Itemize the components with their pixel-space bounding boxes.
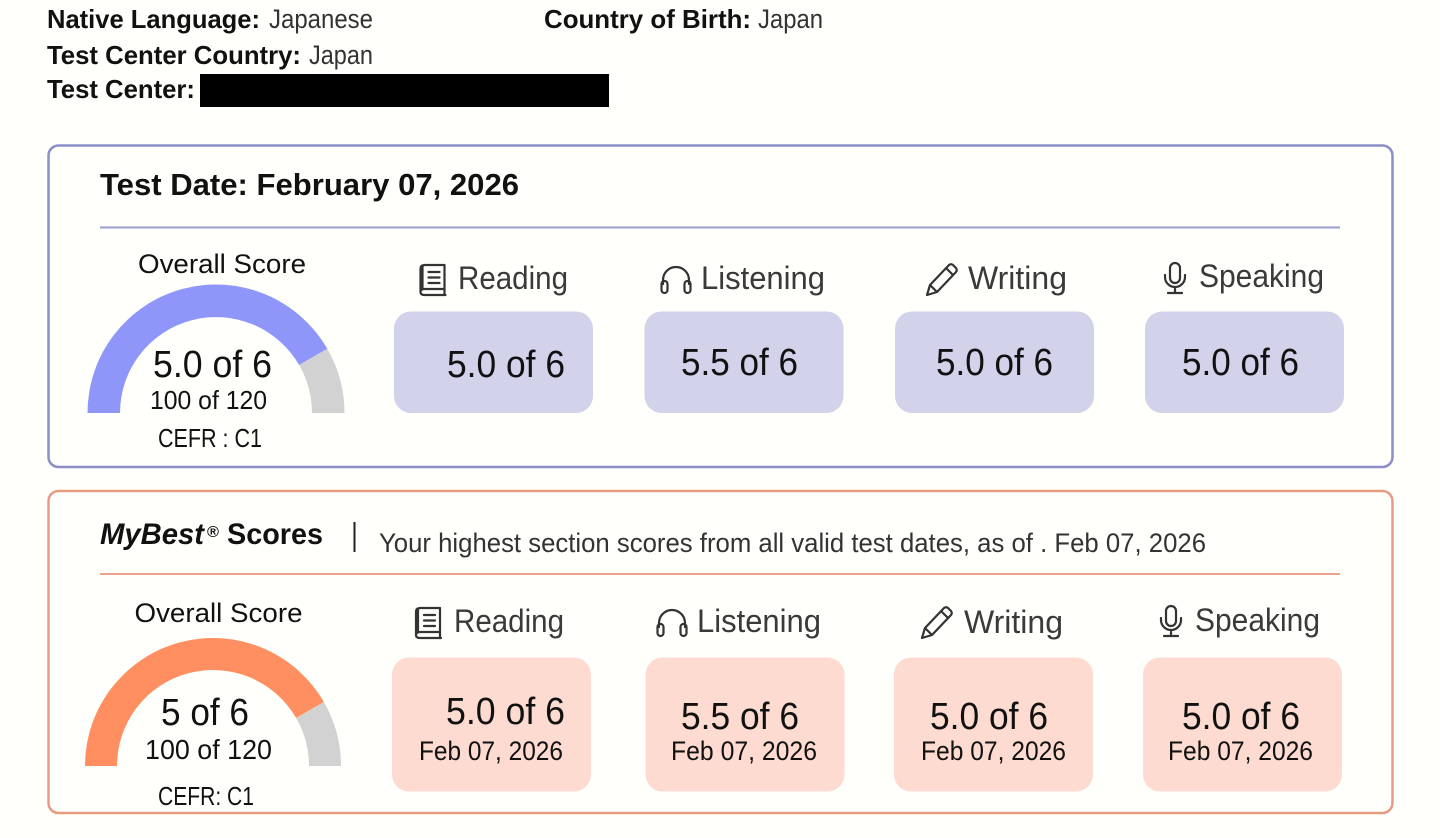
icon: microphone: [1165, 263, 1185, 293]
section: writing: 5.0 of 6: [930, 696, 1048, 738]
candidate details: Japan: [758, 4, 823, 34]
panel: mybest scores: [48, 491, 1392, 813]
section: writing: Feb 07, 2026: [921, 736, 1066, 766]
icon: microphone: [1161, 606, 1181, 636]
section: listening: Listening: [701, 260, 825, 296]
icon: headphones: [662, 267, 690, 293]
heading: mybest scores: MyBest: [100, 518, 206, 551]
icon: book: [420, 265, 446, 295]
section: speaking: 5.0 of 6: [1182, 696, 1300, 738]
section: listening: [646, 603, 844, 792]
overall score gauge: 100 of 120: [150, 385, 267, 415]
section: speaking: Speaking: [1195, 602, 1320, 638]
candidate details: Country of Birth:: [544, 4, 751, 34]
section: listening: Feb 07, 2026: [671, 736, 817, 766]
overall score gauge: CEFR : C1: [158, 423, 262, 453]
overall score gauge: 5 of 6: [161, 692, 249, 734]
overall score gauge: 100 of 120: [145, 734, 272, 765]
section: writing: 5.0 of 6: [936, 342, 1053, 384]
description text: Your highest section scores from all valid test dates, as of . Feb 07, 2026: [379, 528, 1206, 558]
overall score gauge: [88, 249, 344, 453]
candidate details: Japan: [309, 40, 373, 70]
section: writing: Writing: [968, 260, 1067, 296]
heading: mybest scores: [100, 518, 323, 551]
section: reading: 5.0 of 6: [446, 691, 565, 733]
icon: pencil: [927, 264, 957, 295]
overall score gauge: [85, 598, 341, 811]
section: listening: 5.5 of 6: [681, 342, 798, 384]
icon: pencil: [922, 607, 952, 638]
candidate details: Native Language:: [47, 4, 260, 34]
candidate details: Japanese: [269, 4, 373, 34]
overall score gauge: 5.0 of 6: [153, 344, 272, 386]
section: reading: Reading: [458, 260, 568, 296]
section: listening: Listening: [697, 603, 821, 639]
heading: mybest scores: Scores: [227, 518, 323, 551]
section: writing: [895, 260, 1094, 413]
overall score gauge: Overall Score: [134, 598, 302, 628]
candidate details: [47, 4, 823, 107]
section: speaking: Speaking: [1199, 258, 1324, 294]
section: listening: 5.5 of 6: [681, 696, 799, 738]
overall score gauge: Overall Score: [138, 249, 306, 279]
candidate details: Test Center:: [47, 74, 195, 104]
section: speaking: [1143, 602, 1342, 792]
candidate details: Test Center Country:: [47, 40, 301, 70]
section: writing: Writing: [964, 604, 1063, 640]
panel: test date scores: [48, 146, 1392, 467]
section: speaking: [1145, 258, 1344, 413]
section: writing: [894, 604, 1093, 792]
overall score gauge: CEFR: C1: [158, 781, 254, 811]
section: reading: Reading: [454, 603, 564, 639]
heading: mybest scores: ®: [207, 524, 219, 541]
section: listening: [644, 260, 844, 413]
heading: test date: Test Date: February 07, 2026: [100, 167, 519, 202]
section: reading: 5.0 of 6: [447, 344, 565, 386]
section: reading: [394, 260, 593, 413]
section: reading: [392, 603, 591, 792]
section: speaking: 5.0 of 6: [1182, 342, 1299, 384]
icon: headphones: [658, 610, 686, 636]
section: speaking: Feb 07, 2026: [1168, 736, 1313, 766]
section: reading: Feb 07, 2026: [419, 736, 563, 766]
icon: book: [416, 608, 441, 638]
